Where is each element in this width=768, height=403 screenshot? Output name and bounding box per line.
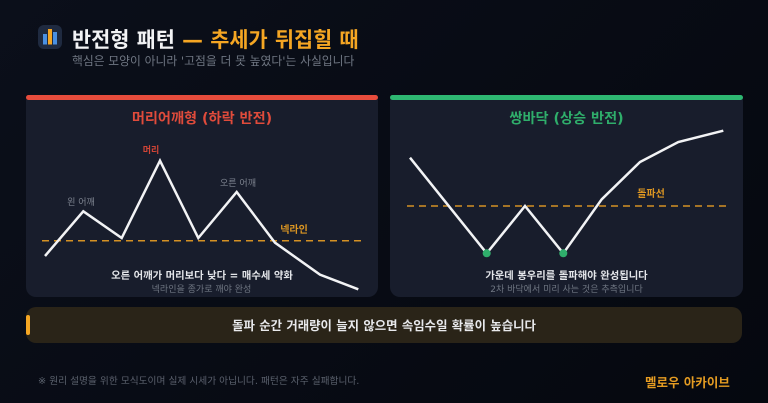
- footnote: ※ 원리 설명을 위한 모식도이며 실제 시세가 아닙니다. 패턴은 자주 실패합니다.: [38, 376, 359, 387]
- note: double bottom: 2차 바닥에서 미리 사는 것은 추측입니다: [490, 285, 643, 295]
- caption: head and shoulders: 오른 어깨가 머리보다 낮다 = 매수세 약화: [111, 270, 293, 282]
- label: neckline: 넥라인: [280, 225, 308, 236]
- subtitle: 핵심은 모양이 아니라 '고점을 더 못 높였다'는 사실입니다: [72, 54, 354, 68]
- label: left shoulder: 왼 어깨: [67, 198, 95, 208]
- label: breakout line: 돌파선: [637, 189, 665, 200]
- heading: head and shoulders: 머리어깨형 (하락 반전): [132, 111, 272, 127]
- caption: double bottom: 가운데 봉우리를 돌파해야 완성됩니다: [485, 270, 648, 282]
- panel accent: red: [26, 95, 378, 100]
- title: 반전형 패턴 — 추세가 뒤집힐 때: [72, 28, 359, 52]
- note: head and shoulders: 넥라인을 종가로 깨야 완성: [152, 285, 251, 295]
- callout accent: [26, 315, 30, 335]
- icon: bar chart: [38, 25, 62, 49]
- heading: double bottom: 쌍바닥 (상승 반전): [509, 111, 624, 127]
- callout text: 돌파 순간 거래량이 늘지 않으면 속임수일 확률이 높습니다: [232, 318, 536, 333]
- callout: [26, 307, 742, 343]
- panel accent: green: [390, 95, 743, 100]
- label: right shoulder: 오른 어깨: [220, 179, 256, 189]
- label: head: 머리: [143, 146, 159, 156]
- brand: 멜로우 아카이브: [645, 375, 730, 390]
- panel: head and shoulders: [26, 95, 378, 297]
- panel: double bottom: [390, 95, 743, 297]
